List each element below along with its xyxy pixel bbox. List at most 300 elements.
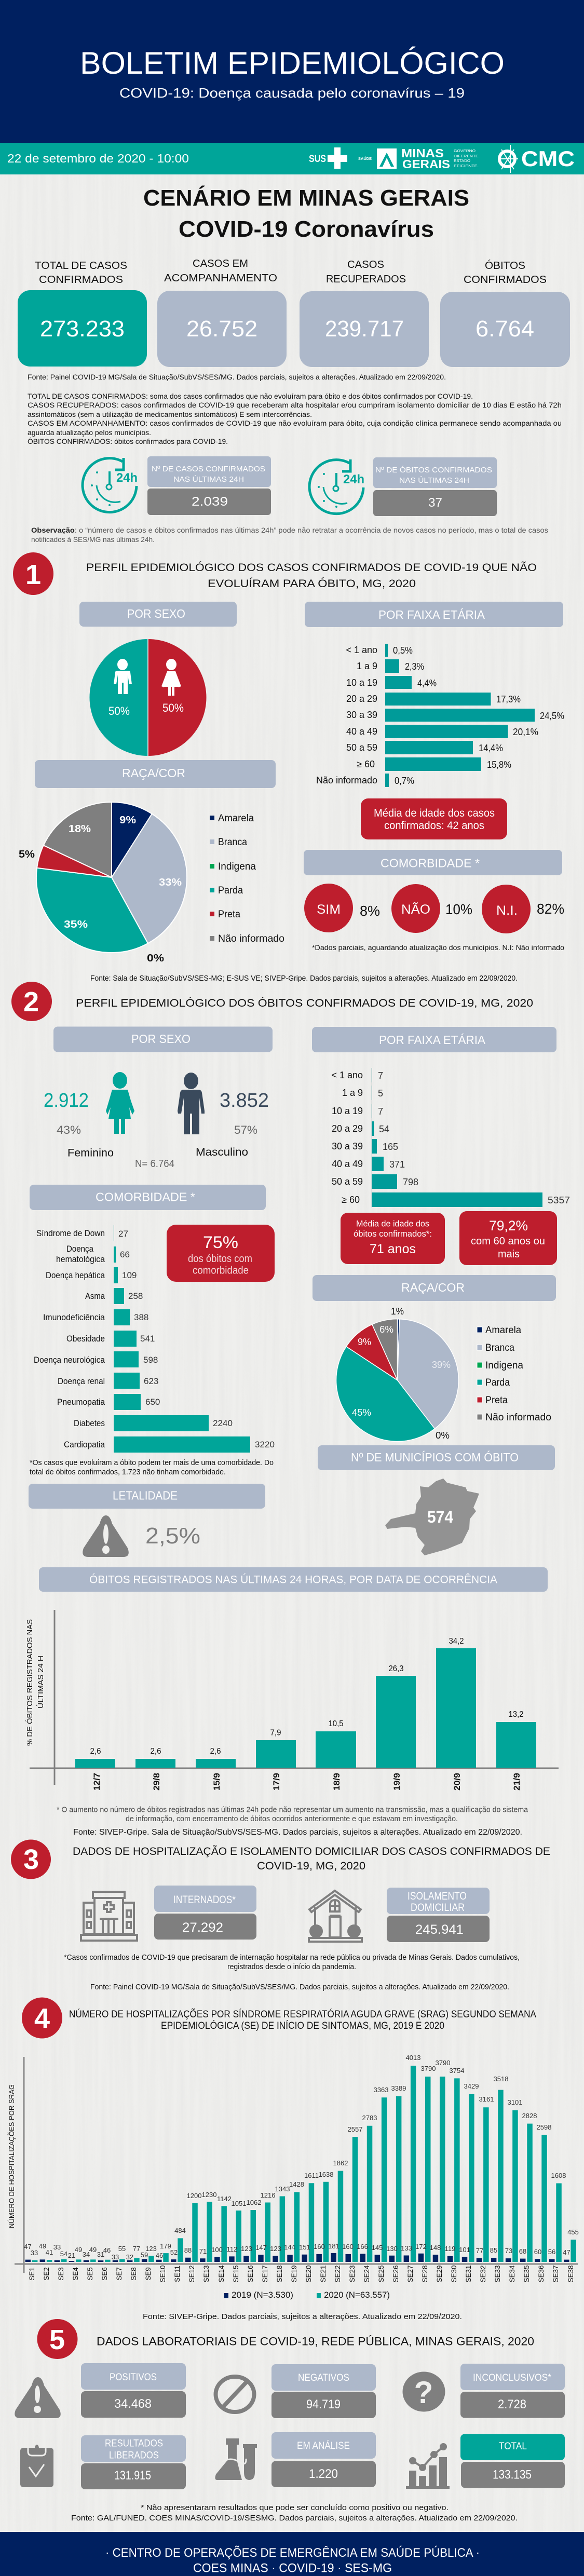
legend: raça/cor: Não informado — [218, 933, 284, 944]
footer banner — [0, 2532, 584, 2576]
logo: Minas Gerais: MINAS — [401, 146, 444, 160]
week labels: SE27 — [406, 2265, 414, 2283]
week labels: SE23 — [348, 2265, 356, 2283]
note: óbitos 24h — [57, 1806, 528, 1823]
header: comorbidade — [304, 850, 562, 875]
stat: masculino: 57% — [234, 1123, 257, 1136]
badge 3: 3 — [23, 1844, 39, 1875]
callout: 79,2%: com 60 anos ou — [471, 1236, 545, 1247]
value labels: 3429 — [464, 2082, 479, 2090]
card: em análise — [271, 2432, 376, 2487]
bar chart: comorbidades: 3220 — [255, 1440, 275, 1449]
card: resultados liberados: LIBERADOS — [109, 2450, 159, 2461]
week labels: SE38 — [567, 2265, 575, 2283]
pie labels — [19, 815, 182, 964]
card: isolamento: DOMICILIAR — [411, 1902, 465, 1914]
bar chart: faixa etária óbitos: 7 — [378, 1106, 383, 1117]
value labels: 33 — [31, 2249, 38, 2257]
logo: SUS: SUS — [309, 154, 326, 165]
bar chart: faixa etária óbitos: ≥ 60 — [342, 1195, 360, 1205]
value labels: 160 — [342, 2243, 354, 2250]
heading 3 — [73, 1845, 550, 1872]
value labels: 144 — [284, 2243, 295, 2251]
note: óbitos 24h: de informação, com encerramento de óbitos ocorridos anteriormente e que estavam em investigação. — [126, 1815, 458, 1823]
callout: 79,2%: 79,2% — [489, 1218, 528, 1233]
value labels: 151 — [299, 2243, 310, 2251]
value labels: 52 — [170, 2248, 178, 2256]
value labels: 77 — [476, 2247, 483, 2255]
value labels: 179 — [160, 2242, 171, 2250]
value labels: 68 — [519, 2247, 526, 2255]
definitions text: aguarda atualização pelos municípios. — [28, 429, 151, 437]
kpi: óbitos: ÓBITOS — [485, 260, 525, 272]
panel: section 3 hospitalização — [11, 1840, 550, 1991]
card: negativos — [271, 2364, 376, 2418]
bar chart: óbitos por data: 15/9 — [212, 1773, 222, 1791]
heading 2: PERFIL EPIDEMIOLÓGICO DOS ÓBITOS CONFIRMADOS DE COVID-19, MG, 2020 — [76, 997, 533, 1009]
definitions text: CASOS RECUPERADOS: casos confirmados de COVID-19 que receberam alta hospitalar e/ou cumpriram isolamento domiciliar de 10 dias E estão há 72h — [28, 401, 562, 409]
icon: clock 24h deaths — [309, 459, 364, 514]
week labels: SE12 — [188, 2265, 196, 2283]
value labels: 123 — [241, 2245, 252, 2253]
kpi: recuperados: RECUPERADOS — [326, 274, 406, 285]
stat: feminino: 2.912 — [44, 1090, 89, 1111]
bar chart: faixa etária óbitos: 371 — [389, 1159, 405, 1170]
header: por faixa etária — [312, 1027, 556, 1052]
pie labels: 0% — [147, 953, 164, 964]
week labels: SE10 — [159, 2265, 167, 2283]
series 2020 — [32, 2066, 576, 2262]
header: municípios — [318, 1445, 555, 1470]
callout: média de idade — [361, 798, 507, 839]
bar chart: comorbidades: 598 — [143, 1355, 158, 1365]
card: inconclusivos — [460, 2364, 565, 2418]
value labels: 46 — [103, 2246, 111, 2254]
bar chart: óbitos por data: 17/9 — [271, 1773, 281, 1791]
panel: section 1 perfil casos — [13, 552, 564, 983]
heading: cenário: COVID-19 Coronavírus — [179, 216, 434, 242]
icon: female — [161, 659, 181, 696]
week labels: SE32 — [479, 2265, 487, 2283]
heading: cenário — [143, 185, 469, 242]
heading: cenário: CENÁRIO EM MINAS GERAIS — [143, 185, 469, 211]
stat: comorbidade n.i.: 82% — [537, 901, 564, 917]
pie labels: 6% — [379, 1324, 393, 1335]
icon: growth chart — [406, 2443, 450, 2489]
bar chart: óbitos por data: 34,2 — [449, 1637, 464, 1646]
week labels: SE16 — [247, 2265, 254, 2283]
observation note: notificados à SES/MG nas últimas 24h. — [31, 535, 155, 544]
value labels: 49 — [75, 2246, 82, 2254]
callout: média de idade: Média de idade dos casos — [374, 807, 495, 819]
logo: CMC: CMC — [521, 146, 575, 171]
pie labels: 1% — [391, 1306, 404, 1317]
icon: question: ? — [414, 2375, 433, 2410]
definitions text: ÓBITOS CONFIRMADOS: óbitos confirmados para COVID-19. — [28, 438, 228, 445]
bar chart: faixa etária óbitos: 54 — [379, 1124, 389, 1134]
panel: section 5 laboratório — [15, 2319, 565, 2523]
value labels: 32 — [126, 2253, 133, 2261]
heading 4 — [69, 2009, 536, 2031]
pie labels: 18% — [69, 823, 91, 835]
map: Minas Gerais 574: 574 — [427, 1508, 453, 1526]
week labels: SE19 — [290, 2265, 298, 2283]
note: registrados desde o início da pandemia. — [227, 1963, 356, 1971]
value labels: 123 — [270, 2245, 281, 2253]
bar chart: faixa etária casos: 40 a 49 — [346, 726, 377, 737]
legend: raça/cor — [210, 813, 284, 944]
bar chart: faixa etária óbitos — [331, 1068, 570, 1208]
badge 5: 5 — [49, 2324, 65, 2355]
card: óbitos 24h — [373, 457, 497, 516]
bar chart: óbitos por data: 13,2 — [509, 1710, 524, 1719]
bar chart: faixa etária óbitos: 40 a 49 — [332, 1159, 363, 1169]
bar chart: faixa etária casos: 50 a 59 — [346, 742, 377, 753]
card: positivos: POSITIVOS — [110, 2372, 157, 2383]
value labels: 46 — [156, 2252, 163, 2259]
value labels: 1216 — [261, 2191, 275, 2199]
card: resultados liberados: 131.915 — [114, 2469, 151, 2483]
value labels: 147 — [255, 2244, 267, 2252]
header: comorbidade: COMORBIDADE * — [381, 857, 480, 870]
legend: raça/cor: Branca — [485, 1343, 514, 1353]
definitions text: CASOS EM ACOMPANHAMENTO: casos confirmados de COVID-19 que não evoluíram para óbito, cuja condição clínica permanece sendo acompanhada ou — [28, 419, 562, 427]
card: negativos: 94.719 — [306, 2397, 341, 2411]
note: *Casos confirmados de COVID-19 que precisaram de internação hospitalar na rede pública ou privada de Minas Gerais. Dados cumulativos, — [64, 1954, 520, 1962]
value labels: 3101 — [508, 2098, 522, 2106]
header banner — [0, 0, 584, 143]
week labels: SE24 — [363, 2265, 371, 2283]
header: letalidade: LETALIDADE — [113, 1489, 178, 1502]
bar chart: faixa etária óbitos: 20 a 29 — [332, 1123, 363, 1134]
badge 1: 1 — [25, 559, 41, 590]
badge 2: 2 — [23, 986, 39, 1018]
kpi: total de casos — [18, 260, 147, 367]
card: isolamento: ISOLAMENTO — [408, 1890, 467, 1902]
value labels: 1230 — [202, 2191, 216, 2199]
logo: Minas Gerais: EFICIENTE. — [454, 165, 479, 168]
note and source: Fonte: GAL/FUNED. COES MINAS/COVID-19/SESMG. Dados parciais, sujeitos a alterações. Atualizado em 22/09/2020. — [71, 2514, 518, 2523]
value labels: 85 — [490, 2246, 497, 2254]
value labels: 1062 — [247, 2199, 261, 2206]
value labels: 3161 — [479, 2095, 494, 2103]
callout: 79,2% — [459, 1211, 557, 1265]
subtitle: COVID-19: Doença causada pelo coronavírus – 19 — [119, 85, 465, 101]
callout: média idade óbitos: Média de idade dos — [356, 1219, 429, 1228]
stat: feminino — [44, 1072, 134, 1159]
value labels: 166 — [357, 2243, 368, 2250]
bar chart: faixa etária óbitos: 50 a 59 — [332, 1176, 363, 1187]
footnote comorbidades: *Os casos que evoluíram a óbito podem ter mais de uma comorbidade. Do — [30, 1459, 274, 1467]
value labels: 77 — [133, 2245, 140, 2253]
logo: CMC — [498, 145, 575, 173]
title: BOLETIM EPIDEMIOLÓGICO — [80, 46, 505, 80]
legend: raça/cor: Parda — [485, 1377, 510, 1388]
value labels: 47 — [24, 2243, 32, 2250]
legend: raça/cor: Preta — [218, 909, 240, 920]
header: óbitos 24 horas: ÓBITOS REGISTRADOS NAS ÚLTIMAS 24 HORAS, POR DATA DE OCORRÊNCIA — [89, 1574, 497, 1585]
header: municípios: Nº DE MUNICÍPIOS COM ÓBITO — [351, 1450, 519, 1464]
legend: raça/cor: Branca — [218, 837, 247, 848]
bar chart: comorbidades: Doença hepática — [46, 1270, 105, 1280]
bar chart: óbitos por data: 18/9 — [332, 1773, 342, 1791]
map: Minas Gerais 574 — [385, 1479, 479, 1555]
badge 5 — [37, 2319, 78, 2359]
card: casos 24h: 2.039 — [192, 495, 228, 509]
note and source: * Não apresentaram resultados que pode ser concluído como positivo ou negativo. — [141, 2503, 449, 2512]
footnote comorbidades — [30, 1459, 274, 1476]
legend — [224, 2290, 390, 2300]
callout: média de idade: confirmados: 42 anos — [384, 820, 484, 832]
pie: sexo: 50% — [162, 701, 184, 714]
value labels: 56 — [548, 2248, 555, 2256]
value labels: 1051 — [232, 2200, 246, 2207]
value labels: 4013 — [406, 2054, 420, 2062]
card: óbitos 24h: Nº DE ÓBITOS CONFIRMADOS — [375, 466, 492, 474]
kpi: óbitos — [440, 260, 570, 367]
card: casos 24h: NAS ÚLTIMAS 24H — [173, 475, 244, 484]
card: inconclusivos: INCONCLUSIVOS* — [473, 2372, 552, 2383]
bar chart: faixa etária casos: 24,5% — [540, 711, 564, 721]
kpi: em acompanhamento: 26.752 — [186, 316, 257, 342]
pie labels: 0% — [436, 1430, 450, 1441]
value labels: 33 — [53, 2243, 61, 2251]
footnote comorbidade: *Dados parciais, aguardando atualização dos municípios. N.I: Não informado — [312, 943, 564, 952]
bar chart: comorbidades: Imunodeficiência — [43, 1312, 105, 1322]
heading 4: EPIDEMIOLÓGICA (SE) DE INÍCIO DE SINTOMAS, MG, 2019 E 2020 — [161, 2020, 444, 2031]
card: isolamento — [387, 1888, 490, 1942]
definitions text: TOTAL DE CASOS CONFIRMADOS: soma dos casos confirmados que não evoluíram para óbito e dos óbitos confirmados por COVID-19. — [28, 392, 473, 400]
bar chart: óbitos por data: 7,9 — [270, 1729, 281, 1737]
icon: clock 24h cases — [83, 458, 138, 512]
header: por faixa etária: POR FAIXA ETÁRIA — [378, 608, 485, 621]
pie: raça/cor casos — [36, 802, 187, 953]
week labels: SE15 — [232, 2265, 240, 2283]
source note: Fonte: Painel COVID-19 MG/Sala de Situação/SubVS/SES/MG. Dados parciais, sujeitos a alterações. Atualizado em 22/09/2020. — [28, 373, 446, 381]
bar chart: faixa etária óbitos: 165 — [383, 1142, 398, 1152]
bar chart: óbitos por data — [25, 1610, 559, 1791]
bar chart: faixa etária casos: 10 a 19 — [346, 677, 377, 688]
bar chart: faixa etária casos: 20 a 29 — [346, 694, 377, 704]
value labels: 2557 — [348, 2125, 362, 2133]
series 2019 — [25, 2253, 569, 2262]
bar chart: comorbidades: Pneumopatia — [57, 1397, 105, 1407]
week labels: SE9 — [144, 2267, 152, 2281]
week labels: SE8 — [130, 2267, 138, 2281]
value labels: 3790 — [436, 2059, 450, 2067]
kpi: recuperados: 239.717 — [325, 316, 404, 342]
legend: raça/cor: Indigena — [218, 861, 256, 872]
footer banner: · CENTRO DE OPERAÇÕES DE EMERGÊNCIA EM SAÚDE PÚBLICA · — [105, 2545, 480, 2560]
icon: warning — [83, 1515, 129, 1557]
value labels: 54 — [60, 2250, 67, 2258]
stat: masculino: Masculino — [196, 1146, 248, 1158]
bar chart: óbitos por data: 10,5 — [328, 1719, 344, 1728]
value labels — [24, 2054, 579, 2261]
bar chart: óbitos por data: 2,6 — [151, 1747, 161, 1756]
value labels: 1428 — [289, 2180, 304, 2188]
bar chart: faixa etária óbitos: 7 — [378, 1070, 383, 1081]
badge 3 — [11, 1840, 51, 1879]
week labels: SE22 — [334, 2265, 342, 2283]
week labels: SE26 — [392, 2265, 400, 2283]
source: Fonte: SIVEP-Gripe. Dados parciais, sujeitos a alterações. Atualizado em 22/09/2020. — [143, 2312, 462, 2321]
bar chart: comorbidades: Doença — [66, 1244, 93, 1254]
card: casos 24h — [147, 456, 271, 515]
header: comorbidade — [30, 1185, 266, 1210]
pie labels: 9% — [358, 1337, 371, 1347]
value labels: 130 — [386, 2245, 398, 2253]
kpi: recuperados: CASOS — [347, 259, 384, 270]
value labels: 49 — [89, 2246, 97, 2254]
value labels: 112 — [227, 2245, 237, 2253]
card: positivos — [81, 2363, 186, 2418]
week labels: SE7 — [115, 2267, 123, 2281]
week labels: SE33 — [494, 2265, 501, 2283]
value labels: 484 — [174, 2227, 186, 2234]
icon: male — [114, 659, 132, 694]
week labels: SE3 — [57, 2267, 65, 2281]
bar chart: comorbidades: Doença neurológica — [34, 1355, 105, 1365]
note: óbitos 24h: * O aumento no número de óbitos registrados nas últimas 24h pode não representar um aumento na transmissão, mas a qualificação do sistema — [57, 1806, 528, 1814]
icon: house — [309, 1891, 362, 1942]
stat: comorbidade sim: SIM — [317, 902, 341, 917]
value labels: 3518 — [494, 2075, 508, 2083]
week labels: SE2 — [43, 2267, 50, 2281]
pie labels: 33% — [159, 877, 182, 888]
bar chart: óbitos por data: 12/7 — [92, 1773, 102, 1791]
pie labels: 35% — [64, 919, 88, 930]
logo: Minas Gerais — [358, 146, 480, 171]
bar chart: faixa etária casos: ≥ 60 — [357, 759, 375, 769]
icon: flasks — [215, 2438, 257, 2480]
stat: comorbidade não: 10% — [445, 901, 472, 917]
bar chart: faixa etária óbitos: 5357 — [548, 1195, 570, 1205]
value labels: 2783 — [362, 2114, 377, 2122]
card: casos 24h: Nº DE CASOS CONFIRMADOS — [152, 465, 265, 473]
card: resultados liberados: RESULTADOS — [105, 2438, 163, 2449]
value labels: 1638 — [319, 2171, 333, 2178]
header: por faixa etária: POR FAIXA ETÁRIA — [379, 1033, 486, 1047]
kpi: recuperados — [300, 259, 429, 367]
value labels: 34 — [83, 2250, 90, 2258]
callout: 75% comorbidade: comorbidade — [193, 1265, 249, 1276]
value labels: 2828 — [522, 2112, 537, 2120]
value labels: 1142 — [217, 2195, 232, 2203]
bar chart: faixa etária casos: 30 a 39 — [346, 710, 377, 720]
bar chart: comorbidades: 109 — [122, 1270, 137, 1280]
bar chart: faixa etária casos: 14,4% — [479, 743, 503, 753]
bar chart: comorbidades — [34, 1225, 275, 1453]
value labels: 133 — [401, 2244, 412, 2252]
bar chart: comorbidades: 2240 — [213, 1418, 233, 1428]
value labels: 145 — [372, 2244, 383, 2252]
pie labels: 9% — [119, 815, 136, 826]
card: internados — [154, 1886, 256, 1940]
week labels: SE13 — [202, 2265, 210, 2283]
value labels: 1200 — [187, 2192, 201, 2200]
bar chart: faixa etária óbitos: 1 a 9 — [342, 1088, 363, 1098]
value labels: 21 — [68, 2252, 75, 2259]
bar chart: óbitos por data: 19/9 — [392, 1773, 402, 1791]
bar chart: faixa etária casos: 1 a 9 — [357, 661, 377, 671]
value labels: 71 — [199, 2247, 207, 2255]
bar chart: comorbidades: 27 — [118, 1229, 128, 1239]
card: isolamento: 245.941 — [415, 1922, 464, 1937]
logo: Minas Gerais: DIFERENTE. — [454, 155, 480, 158]
header: por sexo: POR SEXO — [127, 607, 185, 620]
bar chart: faixa etária casos: 0,7% — [395, 776, 414, 786]
y-axis label: % DE ÓBITOS REGISTRADOS NAS — [25, 1619, 34, 1746]
header: raça/cor: RAÇA/COR — [122, 766, 185, 780]
value labels: 172 — [415, 2243, 427, 2250]
logo: Minas Gerais: GERAIS — [402, 157, 450, 171]
icon: female — [106, 1072, 134, 1134]
stat: masculino — [178, 1073, 269, 1158]
callout: 75% comorbidade: dos óbitos com — [188, 1253, 252, 1265]
week labels: SE11 — [173, 2266, 181, 2282]
value labels: 123 — [145, 2245, 157, 2253]
bar chart: comorbidades: Obesidade — [66, 1334, 105, 1344]
stat: masculino: 3.852 — [220, 1090, 269, 1111]
card: óbitos 24h: NAS ÚLTIMAS 24H — [399, 476, 469, 485]
value labels: 2598 — [537, 2123, 551, 2131]
week labels: SE30 — [450, 2265, 458, 2283]
badge 4 — [22, 1998, 62, 2038]
header: por sexo — [79, 602, 237, 627]
bar chart: comorbidades: Síndrome de Down — [36, 1228, 105, 1238]
kpi: total de casos: CONFIRMADOS — [39, 274, 123, 286]
bar chart: comorbidades: 258 — [128, 1291, 143, 1301]
icon: warning — [15, 2377, 61, 2418]
bar chart: óbitos por data: 26,3 — [388, 1664, 404, 1673]
value labels: 3754 — [450, 2067, 464, 2075]
week labels: SE20 — [305, 2265, 313, 2283]
week labels: SE18 — [276, 2265, 283, 2283]
callout: 75% comorbidade — [167, 1225, 275, 1282]
legend: raça/cor — [477, 1325, 551, 1423]
source section 1: Fonte: Sala de Situação/SubVS/SES-MG; E-SUS VE; SIVEP-Gripe. Dados parciais, sujeitos a alterações. Atualizado em 22/09/2020. — [90, 974, 518, 983]
header: raça/cor — [313, 1275, 556, 1301]
bar chart: faixa etária casos: 17,3% — [496, 694, 521, 704]
heading 1 — [86, 561, 537, 590]
card: total: TOTAL — [499, 2441, 527, 2452]
heading 1: EVOLUÍRAM PARA ÓBITO, MG, 2020 — [208, 578, 416, 590]
value labels: 41 — [46, 2248, 53, 2256]
value labels: 60 — [534, 2248, 541, 2256]
icon: prohibited — [216, 2377, 254, 2412]
logo: Minas Gerais: SAÚDE — [358, 156, 372, 161]
pie labels: 5% — [19, 849, 35, 860]
stat: letalidade: 2,5% — [145, 1523, 200, 1549]
icon: clock 24h cases: 24h — [116, 471, 138, 485]
definitions text — [28, 392, 562, 445]
card: em análise: 1.220 — [309, 2467, 338, 2481]
definitions text: assintomáticos (sem a utilização de medicamentos sintomáticos) E sem intercorrências. — [28, 411, 312, 418]
legend: raça/cor: Parda — [218, 885, 243, 896]
source: Fonte: SIVEP-Gripe. Sala de Situação/SubVS/SES-MG. Dados parciais, sujeitos a alterações. Atualizado em 22/09/2020. — [73, 1828, 522, 1837]
bar chart: comorbidades: hematológica — [56, 1254, 105, 1264]
badge 2 — [11, 982, 52, 1021]
bar chart: óbitos por data: 21/9 — [512, 1773, 522, 1791]
week labels: SE34 — [508, 2265, 516, 2283]
bar chart: óbitos por data: 2,6 — [90, 1747, 101, 1756]
heading 3: DADOS DE HOSPITALIZAÇÃO E ISOLAMENTO DOMICILIAR DOS CASOS CONFIRMADOS DE — [73, 1845, 550, 1858]
bar chart: faixa etária óbitos: 5 — [378, 1088, 383, 1099]
value labels: 148 — [430, 2244, 441, 2252]
header: por faixa etária — [305, 602, 563, 627]
kpi: total de casos: 273.233 — [40, 316, 125, 342]
